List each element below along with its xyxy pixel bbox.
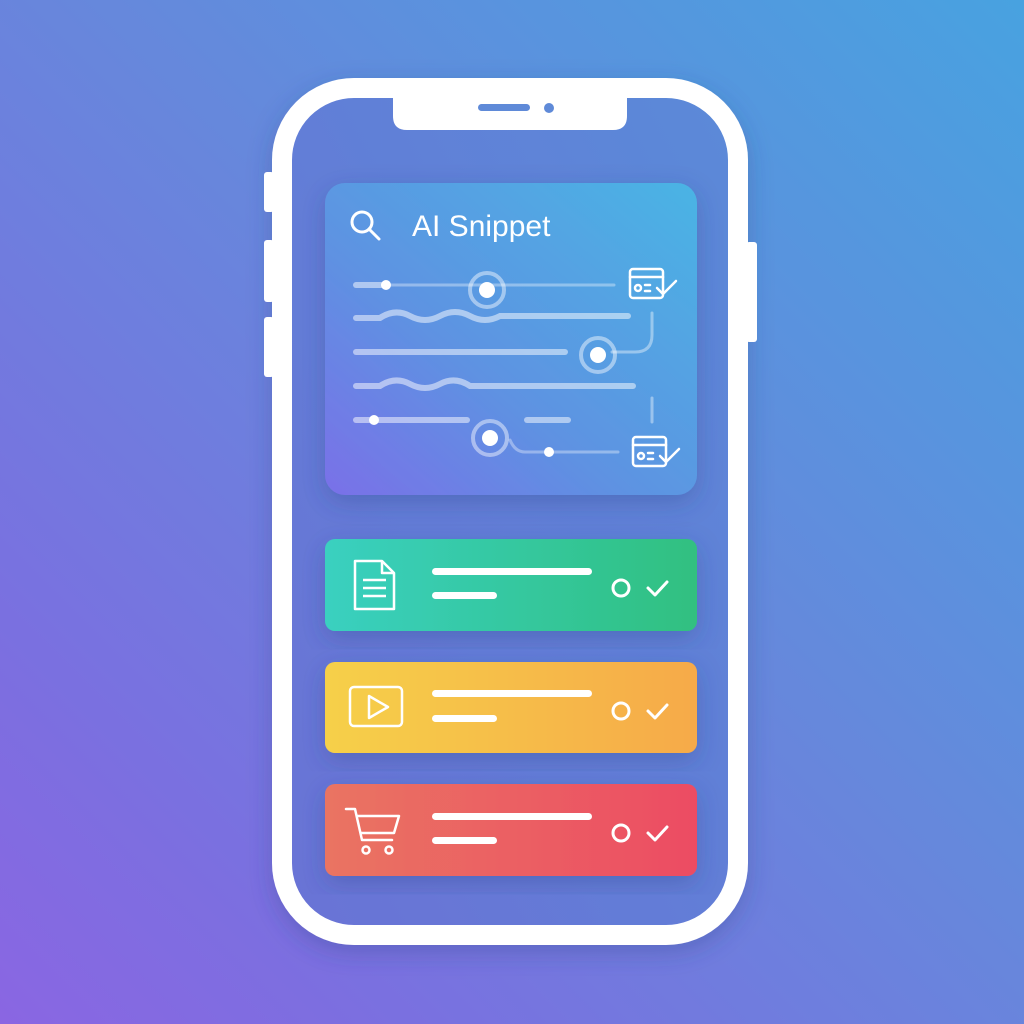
side buttons <box>264 172 274 212</box>
card: video <box>325 662 697 753</box>
card: shopping <box>325 784 697 876</box>
icon: play <box>350 687 402 726</box>
heading: AI Snippet <box>412 210 551 243</box>
icon: verified page 1 <box>630 269 676 298</box>
notch <box>393 96 627 130</box>
icon: cart <box>346 809 399 854</box>
nodes <box>369 273 615 457</box>
card: document <box>325 539 697 631</box>
phone <box>264 88 757 935</box>
snippet lines <box>356 285 652 452</box>
icon: search <box>352 212 379 239</box>
icon: document <box>355 561 394 609</box>
panel: AI snippet <box>325 183 697 495</box>
icon: verified page 2 <box>633 437 679 466</box>
